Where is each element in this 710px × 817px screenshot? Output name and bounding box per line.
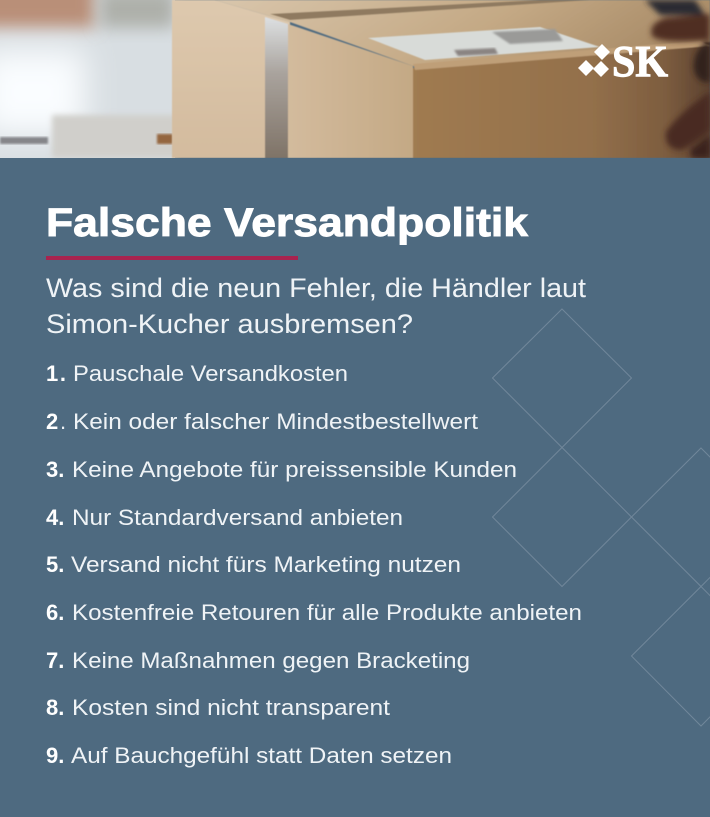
hand (645, 0, 710, 158)
item 9: 9. (46, 743, 64, 768)
item 6: Kostenfreie Retouren für alle Produkte anbieten (72, 600, 582, 625)
item 9: Auf Bauchgefühl statt Daten setzen (71, 743, 452, 768)
logo: SK (578, 44, 668, 78)
item 2: 2 (46, 409, 58, 434)
item 5: 5. (46, 552, 64, 577)
logo letters: SK (612, 37, 668, 86)
subtitle: Was sind die neun Fehler, die Händler laut (46, 273, 587, 303)
item 1: Pauschale Versandkosten (73, 361, 348, 386)
item 4: 4. (46, 505, 64, 530)
photo: cardboard parcel (0, 0, 710, 158)
item 3: Keine Angebote für preissensible Kunden (72, 457, 517, 482)
shipping label (368, 27, 600, 60)
box left face (172, 0, 290, 158)
box front face (413, 42, 710, 158)
title: Falsche Versandpolitik (46, 201, 529, 245)
blurred background (0, 0, 177, 158)
title underline (46, 256, 298, 260)
top tape strip (270, 0, 590, 20)
item 8: Kosten sind nicht transparent (72, 695, 390, 720)
label print (454, 48, 498, 56)
item 3: 3. (46, 457, 64, 482)
front face top edge (413, 41, 710, 70)
item 7: Keine Maßnahmen gegen Bracketing (72, 648, 470, 673)
decorative diamonds (492, 309, 710, 726)
vertical packing tape (265, 17, 288, 158)
item 2: . (60, 409, 66, 434)
box top face (215, 0, 710, 66)
subtitle: Simon-Kucher ausbremsen? (46, 309, 413, 339)
logo diamonds (578, 44, 610, 77)
item 7: 7. (46, 648, 64, 673)
box middle face (288, 24, 413, 158)
item 6: 6. (46, 600, 64, 625)
item 4: Nur Standardversand anbieten (72, 505, 403, 530)
list: nine mistakes (46, 361, 582, 768)
item 8: 8. (46, 695, 64, 720)
subtitle (46, 273, 587, 339)
label barcode (492, 29, 563, 44)
item 5: Versand nicht fürs Marketing nutzen (71, 552, 461, 577)
box faces (172, 0, 710, 158)
item 2: Kein oder falscher Mindestbestellwert (73, 409, 478, 434)
item 1: 1. (46, 361, 66, 386)
